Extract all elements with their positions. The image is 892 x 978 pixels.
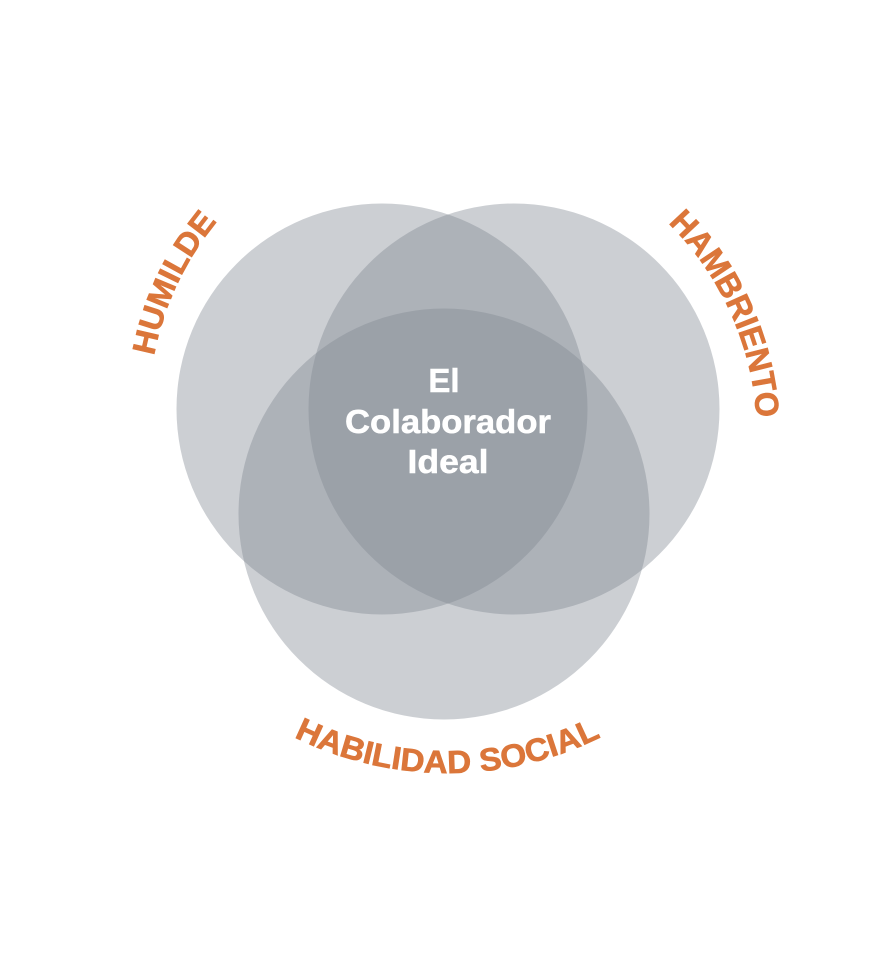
circle: humilde	[176, 204, 588, 614]
center title: El	[428, 362, 460, 399]
center title: Ideal	[408, 443, 488, 480]
circle: habilidad social	[238, 308, 650, 720]
center title	[345, 362, 551, 480]
label: hambriento: HAMBRIENTO	[669, 208, 779, 416]
center title: Colaborador	[345, 403, 551, 440]
circle: hambriento	[308, 204, 720, 614]
label: humilde: HUMILDE	[132, 209, 217, 354]
label: habilidad social: HABILIDAD SOCIAL	[296, 718, 601, 774]
